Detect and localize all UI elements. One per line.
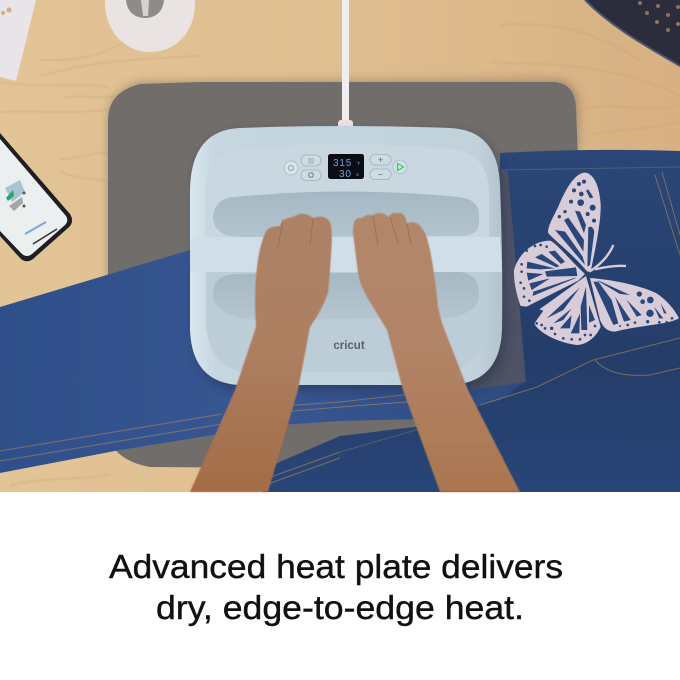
headline <box>109 548 563 626</box>
dark corner mat <box>585 0 680 66</box>
temperature display: S <box>356 172 359 177</box>
mat contact shadow <box>108 80 578 300</box>
finger shading <box>278 216 411 248</box>
right wing <box>590 278 679 332</box>
lower panel <box>206 272 488 372</box>
start button <box>393 160 407 174</box>
top wing <box>548 173 601 272</box>
bottom wing <box>534 276 601 345</box>
butterfly iron-on design <box>514 173 679 345</box>
press body <box>190 126 502 385</box>
brand logo: cricut <box>333 340 365 352</box>
upper grip well <box>213 192 479 237</box>
headline: Advanced heat plate delivers <box>109 548 563 585</box>
top panel <box>205 144 489 237</box>
temperature display: 30 <box>339 169 352 180</box>
center band <box>190 237 502 272</box>
jeans: left leg <box>0 250 525 473</box>
power cord <box>338 0 353 133</box>
temperature display <box>328 154 364 180</box>
jeans stitching <box>0 167 680 484</box>
temperature display: °F <box>356 161 361 166</box>
right hand and arm <box>353 213 520 492</box>
smartphone with app <box>0 133 72 261</box>
wood table surface <box>0 0 680 492</box>
press shadow <box>193 132 506 391</box>
headline: dry, edge-to-edge heat. <box>156 589 524 626</box>
ironing mat <box>108 82 578 470</box>
gray pressing sheet <box>470 168 526 390</box>
power button <box>284 161 298 175</box>
paper card <box>0 0 36 81</box>
white dome holder <box>105 0 195 52</box>
heat press <box>190 126 506 391</box>
left hand and arm <box>190 214 332 492</box>
left wing <box>514 241 585 307</box>
photo: heat press on a work table <box>0 0 680 492</box>
temperature display: 315 <box>333 158 352 169</box>
plus and minus buttons <box>370 154 391 180</box>
lower grip well <box>213 272 479 320</box>
jeans: right side and lower leg <box>262 150 680 492</box>
plus and minus buttons: + <box>378 155 383 165</box>
plus and minus buttons: − <box>378 170 383 180</box>
left buttons <box>301 155 321 180</box>
